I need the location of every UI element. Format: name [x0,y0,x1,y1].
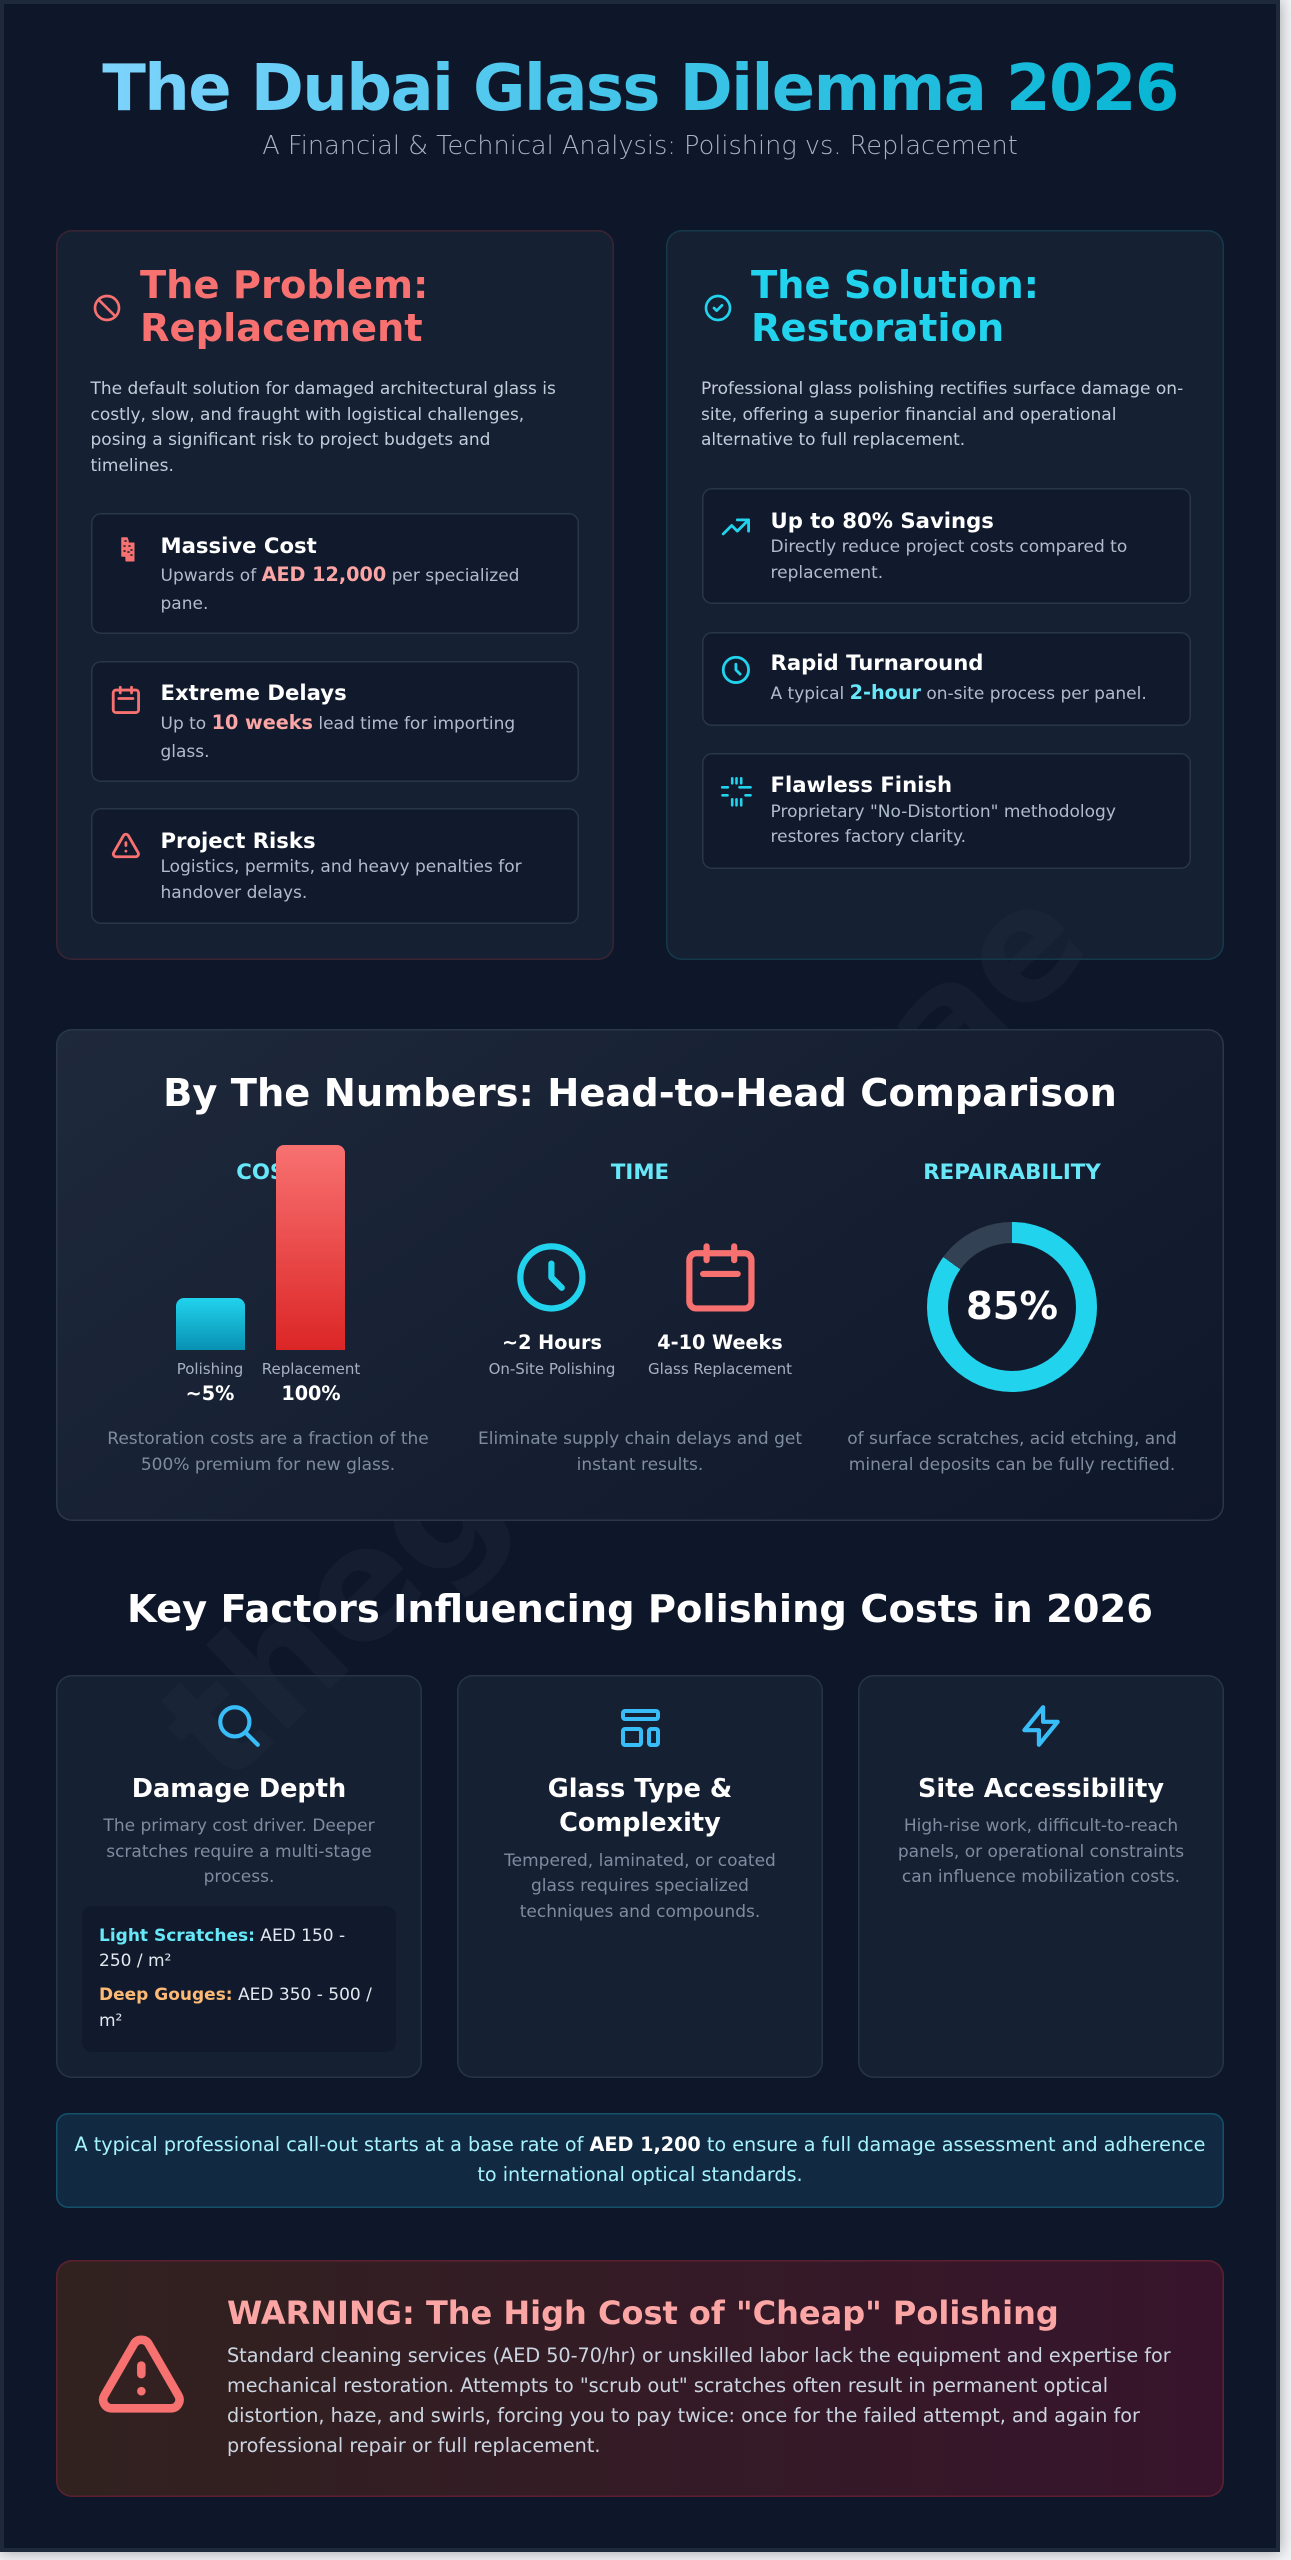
time description: Eliminate supply chain delays and get [478,1429,802,1449]
heading: the problem [140,263,428,351]
value: 2 hours: ~2 Hours [502,1330,602,1354]
item: project risks [91,808,579,924]
cost heading: COST [236,1160,300,1185]
watermark: theglassco.ae [125,846,1121,1817]
time description: instant results. [577,1455,703,1475]
site accessibility text: can influence mobilization costs. [902,1867,1180,1887]
savings title: Up to 80% Savings [770,508,994,533]
icon: magnifier [218,1705,260,1747]
label: glass replacement: Glass Replacement [648,1360,792,1378]
solution intro: Professional glass polishing rectifies surface damage on- [701,379,1183,399]
repairability heading: REPAIRABILITY [923,1160,1101,1185]
massive cost text: pane. [160,594,208,614]
finish text: Proprietary "No-Distortion" methodology [770,802,1116,822]
problem intro: timelines. [90,456,174,476]
glass type heading [548,1774,732,1838]
solution intro [701,379,1183,450]
donut value: 85% [966,1284,1058,1328]
extreme delays text: glass. [160,742,210,762]
panel: warning [56,2260,1224,2497]
finish text [770,802,1116,847]
glass type text: glass requires specialized [531,1876,749,1896]
icon: cost [121,537,134,562]
repairability description [847,1429,1177,1475]
problem intro: costly, slow, and fraught with logistical challenges, [90,405,524,425]
donut chart [927,1222,1097,1392]
subtitle: A Financial & Technical Analysis: Polishing vs. Replacement [262,131,1018,161]
heading: the solution: Restoration [751,306,1004,351]
project risks text: Logistics, permits, and heavy penalties for [160,857,522,877]
title: The Dubai Glass Dilemma 2026 [102,52,1178,126]
light scratches price: Light Scratches: AED 150 - [99,1926,345,1946]
site accessibility heading: Site Accessibility [918,1774,1164,1804]
item: massive cost [91,513,579,634]
warning text [227,2344,1171,2457]
icon: warning [112,832,140,858]
icon: large clock [517,1243,586,1312]
value: 4-10 weeks: 4-10 Weeks [657,1330,783,1354]
project risks text [160,857,522,903]
extreme delays title: Extreme Delays [160,680,347,705]
glass type heading: Glass Type & [548,1774,732,1804]
damage depth heading: Damage Depth [132,1774,346,1804]
heading: comparison: By The Numbers: Head-to-Head Comparison [163,1071,1117,1116]
panel: the solution [666,230,1224,960]
panel: damage depth [56,1675,422,2078]
massive cost text: Upwards of AED 12,000 per specialized [160,563,519,586]
heading: key factors: Key Factors Influencing Polishing Costs in 2026 [127,1586,1153,1632]
savings text: Directly reduce project costs compared to [770,537,1127,557]
icon: sparkle [720,777,752,807]
cost description [107,1429,429,1475]
damage depth text [103,1816,375,1887]
item: finish [702,753,1190,869]
icon: calendar [112,686,140,714]
glass type text: Tempered, laminated, or coated [504,1850,776,1870]
massive cost text [160,563,519,614]
glass type heading: Complexity [559,1808,721,1838]
warning text: professional repair or full replacement. [227,2434,600,2457]
deep gouges price: Deep Gouges: AED 350 - 500 / [99,1985,372,2005]
repairability description: of surface scratches, acid etching, and [847,1429,1177,1449]
finish title: Flawless Finish [770,772,952,797]
icon: large calendar [686,1243,755,1312]
bar: replacement [276,1145,345,1350]
callout text: A typical professional call-out starts at a base rate of AED 1,200 to ensure a full damage assessment and adherence [75,2133,1205,2156]
panel: site accessibility [858,1675,1224,2078]
callout: base rate [56,2113,1224,2208]
item: extreme delays [91,661,579,782]
icon: check circle [704,294,732,322]
label: polishing: Polishing [177,1360,243,1378]
savings text [770,537,1127,583]
item: savings [702,488,1190,604]
warning text: mechanical restoration. Attempts to "scrub out" scratches often result in permanent optical [227,2374,1108,2397]
project risks text: handover delays. [160,883,307,903]
callout text: to international optical standards. [477,2163,803,2186]
warning text: Standard cleaning services (AED 50-70/hr) or unskilled labor lack the equipment and expertise for [227,2344,1171,2367]
icon: clock [722,656,750,684]
turnaround title: Rapid Turnaround [770,650,983,675]
icon: trending up [722,518,750,536]
solution intro: site, offering a superior financial and operational [701,405,1116,425]
value: polishing: ~5% [186,1382,234,1404]
panel: glass type [457,1675,823,2078]
site accessibility text [898,1816,1184,1887]
problem intro: The default solution for damaged architectural glass is [90,379,556,399]
damage depth text: scratches require a multi-stage [106,1842,372,1862]
light scratches price [99,1926,345,1971]
project risks title: Project Risks [160,828,316,853]
label: on-site polishing: On-Site Polishing [489,1360,615,1378]
icon: warning triangle [98,2336,184,2413]
icon: ban [94,294,120,322]
warning text: distortion, haze, and swirls, forcing you to pay twice: once for the failed attempt, and again for [227,2404,1140,2427]
site accessibility text: panels, or operational constraints [898,1842,1184,1862]
panel: the problem [56,230,614,960]
deep gouges price [99,1985,372,2030]
item: turnaround [702,632,1190,726]
bar chart [176,1145,360,1404]
panel: by the numbers [56,1029,1224,1521]
problem intro [90,379,556,476]
bar: polishing [176,1298,244,1350]
glass type text: techniques and compounds. [520,1902,760,1922]
time description [478,1429,802,1475]
site accessibility text: High-rise work, difficult-to-reach [904,1816,1178,1836]
icon: layout [621,1709,660,1747]
glass type text [504,1850,776,1922]
cost description: Restoration costs are a fraction of the [107,1429,429,1449]
warning heading: WARNING: The High Cost of "Cheap" Polishing [227,2294,1059,2332]
extreme delays text: Up to 10 weeks lead time for importing [160,710,515,734]
value: replacement: 100% [281,1382,341,1404]
label: replacement: Replacement [262,1360,360,1378]
problem intro: posing a significant risk to project budgets and [90,430,490,450]
callout text [74,2133,1205,2186]
deep gouges price: m² [99,2010,122,2030]
repairability description: mineral deposits can be fully rectified. [849,1455,1175,1475]
heading: the problem: The Problem: [140,263,428,308]
light scratches price: 250 / m² [99,1951,171,1971]
damage depth text: The primary cost driver. Deeper [103,1816,375,1836]
savings text: replacement. [770,563,883,583]
massive cost title: Massive Cost [160,533,317,558]
donut centre [948,1242,1076,1370]
cost description: 500% premium for new glass. [141,1455,395,1475]
heading: the problem: Replacement [140,306,423,351]
turnaround text: A typical 2-hour on-site process per panel. [770,681,1147,704]
price box [82,1906,396,2052]
heading: the solution [751,263,1039,351]
damage depth text: process. [204,1867,274,1887]
icon: bolt [1022,1705,1060,1747]
extreme delays text [160,710,515,762]
heading: the solution: The Solution: [751,263,1039,308]
time heading: TIME [611,1160,669,1185]
solution intro: alternative to full replacement. [701,430,965,450]
finish text: restores factory clarity. [770,827,966,847]
